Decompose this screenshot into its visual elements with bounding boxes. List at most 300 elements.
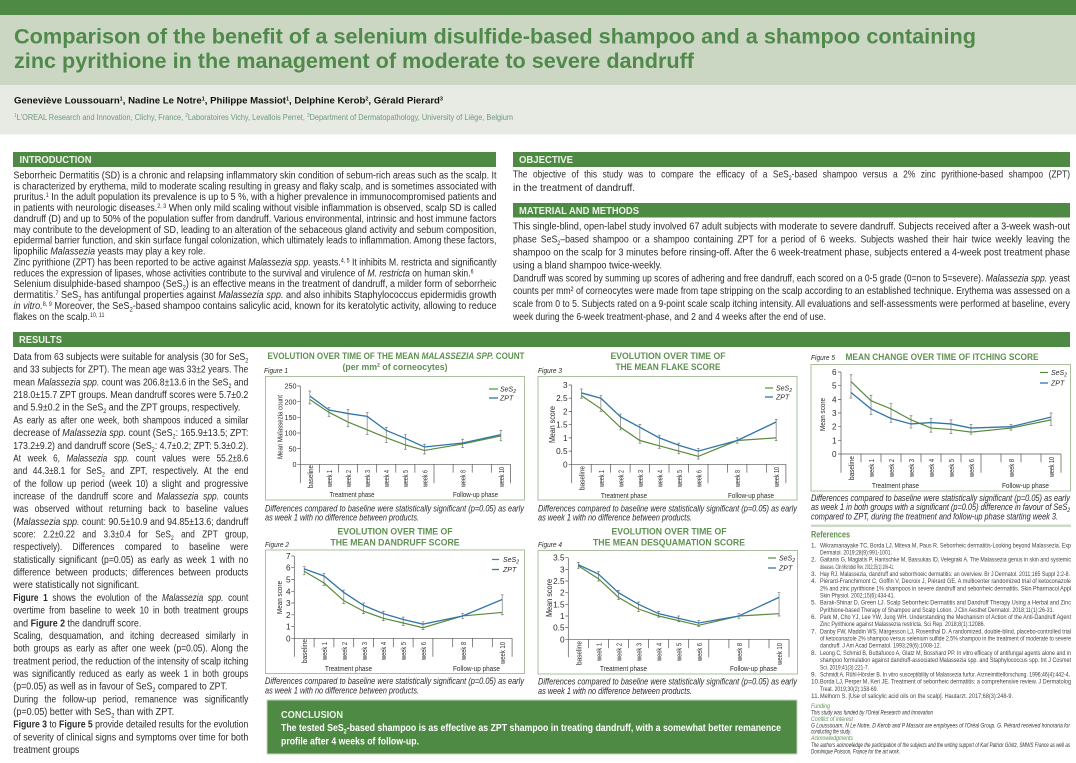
chart title: figure 1: EVOLUTION OVER TIME OF THE MEAN MALASSEZIA SPP. COUNT: [268, 351, 525, 362]
line chart: figure 1: 250: [284, 382, 296, 391]
line chart: figure 5: Follow-up phase: [1002, 481, 1049, 490]
caption: figure 4: as week 1 with no difference between products.: [538, 686, 692, 696]
text block: results: 2: [173, 434, 176, 441]
text block: results: [12, 352, 249, 756]
chart title: figure 5: MEAN CHANGE OVER TIME OF ITCHING SCORE: [846, 352, 1039, 363]
text block: results: was significantly reduced as early as week 1 in both groups: [12, 669, 248, 680]
conclusion box: [267, 700, 797, 754]
line chart: figure 3: 3: [563, 381, 568, 390]
text block: results: (p=0.05) as well as in favour of SeS: [13, 682, 178, 693]
line chart: figure 1: 2: [512, 389, 516, 395]
line chart: figure 1: Follow-up phase: [453, 490, 498, 499]
line chart: figure 5: SeS: [1051, 370, 1064, 377]
funding and acknowledgments: Funding: [811, 703, 830, 710]
caption: figure 2: Differences compared to baseline were statistically significant (p=0.05) as early: [265, 676, 525, 686]
text block: results: and 44.3±8.1 for SeS: [13, 466, 123, 477]
line chart: figure 1: week 8: [459, 470, 468, 488]
line chart: figure 3: Treatment phase: [601, 491, 647, 500]
line chart: figure 5: week 8: [1007, 459, 1016, 478]
line chart: figure 4: 2.5: [553, 577, 565, 586]
text block: introduction: has antifungal properties against: [82, 290, 218, 301]
line chart: figure 5: week 10: [1047, 457, 1056, 478]
text block: results: During the follow-up period, remanence was significantly: [13, 694, 249, 705]
references list: diseases. Clin Microbiol Rev. 2012;25(1):106-41.: [820, 564, 894, 571]
references list: 7.: [811, 628, 817, 635]
caption: figure 1: Differences compared to baseline were statistically significant (p=0.05) as early: [265, 504, 525, 514]
text block: results: and 5.9±0.2 in the SeS: [13, 403, 119, 414]
caption: figure 1: as week 1 with no difference between products.: [265, 512, 419, 522]
line chart: figure 1: Mean Malassezia count: [276, 394, 284, 459]
affiliations: Department of Dermatopathology, University of Liège, Belgium: [310, 112, 513, 122]
line chart: figure 5: 0: [832, 450, 837, 459]
text block: results: decrease of Malassezia spp. count (SeS: [13, 428, 180, 439]
chart title: figure 1: (per mm² of corneocytes): [342, 362, 448, 373]
line chart: figure 5: 2: [832, 423, 837, 432]
line chart: figure 2: week 8: [459, 642, 468, 661]
chart title: figure 1: [268, 351, 525, 373]
line chart: figure 1: week 3: [363, 470, 372, 488]
text block: results: : 4.7±0.2; ZPT: 5.3±0.2).: [155, 441, 248, 452]
caption: figure 3: as week 1 with no difference between products.: [538, 512, 692, 522]
line chart: figure 1: 100: [284, 429, 296, 438]
text block: results: 2: [245, 358, 249, 364]
line chart: figure 5: week 1: [867, 459, 876, 478]
panel: figure 5 itching score: [811, 352, 1071, 522]
line chart: figure 2: 3: [286, 599, 291, 608]
text block: methods: week during the 6-week treatment-phase, and 2 and 4 weeks after the end of use.: [512, 312, 826, 323]
text block: results: of the follow up period (week 10) a slight and progressive: [13, 479, 248, 490]
text block: introduction: 2: [129, 306, 133, 313]
line chart: figure 4: week 1: [594, 643, 603, 662]
text block: results: (p=0.05) better with SeS: [13, 707, 126, 718]
line chart: figure 3: SeS: [776, 386, 789, 392]
line chart: figure 5: week 3: [907, 459, 916, 478]
affiliations: 2: [185, 113, 188, 119]
text block: results: 218.0±15.7 ZPT groups. Mean dandruff scores were 5.7±0.2: [13, 390, 248, 401]
text block: results: treatment period, the reduction of the intensity of scalp itching: [13, 656, 248, 667]
line chart: figure 5: 4: [832, 395, 837, 404]
funding and acknowledgments: Acknowledgments: [810, 735, 854, 742]
conclusion text: [281, 723, 781, 748]
heading: material and methods: MATERIAL AND METHODS: [519, 205, 639, 217]
line chart: figure 4: Follow-up phase: [730, 664, 777, 673]
line chart: figure 3: ZPT: [775, 394, 790, 402]
line chart: figure 3: week 3: [636, 470, 645, 488]
line chart: figure 4: baseline: [574, 641, 583, 665]
line chart: figure 5: 2: [1063, 372, 1067, 378]
references heading: References: [811, 530, 850, 540]
text block: introduction: 7: [55, 291, 59, 297]
conclusion text: The tested SeS: [281, 723, 354, 734]
text block: results: was observed without returning back to baseline values: [12, 504, 248, 515]
chart title: figure 2: THE MEAN DANDRUFF SCORE: [330, 538, 460, 548]
text block: results: 2: [111, 712, 115, 720]
text block: introduction: 2, 3: [157, 204, 167, 210]
text block: introduction: Selenium disulphide-based shampoo (SeS: [14, 279, 203, 290]
authors: 1: [120, 96, 123, 102]
line chart: figure 3: 2: [788, 388, 792, 394]
references list: 9.: [811, 671, 817, 678]
text block: objective: The objective of this study was to compare the efficacy of a SeS: [513, 170, 855, 180]
line chart: figure 1: [266, 376, 524, 500]
text block: introduction: in patients with neurologic diseases.: [14, 203, 174, 214]
line chart: figure 2: 2: [286, 611, 291, 620]
line chart: figure 5: Mean score: [818, 398, 827, 431]
text block: results: 2: [171, 535, 174, 542]
references list: Dermatol. 2019;28(9):991-1001.: [820, 550, 892, 556]
line chart: figure 1: baseline: [306, 465, 315, 488]
line chart: figure 1: week 5: [401, 470, 410, 488]
line chart: figure 5: Treatment phase: [872, 481, 919, 490]
text block: results: overtime from baseline to week 10 in both treatment groups: [13, 606, 248, 617]
title: [14, 24, 976, 73]
text block: introduction: [14, 170, 497, 323]
text block: methods: using a bland shampoo twice-weekly.: [513, 260, 662, 271]
text block: results: of severity of clinical signs and symptoms over time for both: [13, 732, 248, 743]
text block: objective: in the treatment of dandruff.: [513, 183, 635, 194]
text block: results: statistically significant (p=0.05) as early as week 1 with no: [13, 555, 248, 566]
heading: objective: [513, 152, 1070, 167]
line chart: figure 3: 1.5: [556, 421, 568, 430]
text block: results: respectively). Differences compared to baseline were: [13, 542, 248, 553]
funding and acknowledgments: Conflict of interest: [811, 716, 853, 723]
funding and acknowledgments: [810, 703, 1071, 756]
line chart: figure 4: 3: [560, 565, 565, 574]
panel: figure 4 desquamation score: [538, 526, 798, 696]
heading: introduction: INTRODUCTION: [20, 154, 92, 166]
text block: introduction: 1: [46, 193, 49, 199]
line chart: figure 5: week 2: [887, 459, 896, 478]
line chart: figure 2: 6: [286, 564, 291, 573]
line chart: figure 1: 150: [284, 413, 296, 422]
line chart: figure 4: 2: [791, 558, 795, 564]
text block: introduction: -based shampoo contains salicylic acid, known for its keratolytic activity, allowing to reduce: [133, 301, 497, 312]
text block: introduction: 2: [183, 285, 186, 292]
line chart: figure 1: week 2: [344, 470, 353, 488]
text block: results: 2: [152, 446, 155, 453]
chart title: figure 4: THE MEAN DESQUAMATION SCORE: [593, 538, 746, 548]
text block: methods: phase SeS: [513, 234, 566, 245]
authors: , Philippe Massiot: [205, 96, 287, 106]
figure 1 label: Figure 1: [264, 366, 288, 375]
text block: results: Figure 3 to Figure 5 provide detailed results for the evolution: [13, 720, 248, 731]
text block: introduction: Seborrheic Dermatitis (SD) is a chronic and relapsing inflammatory skin condition of sebum-rich areas such as the scalp. It: [14, 170, 497, 182]
panel: introduction: [13, 152, 497, 323]
text block: introduction: epidermal barrier function, and skin surface fungal colonization, which ultimately leads to inflammation. Among these factors,: [14, 236, 496, 247]
line chart: figure 2: baseline: [300, 639, 309, 663]
conclusion text: -based shampoo is as effective as ZPT shampoo in treating dandruff, with a somewhat better remanence: [347, 723, 781, 734]
references list: 2.: [811, 557, 817, 564]
text block: results: treatment groups: [13, 745, 79, 756]
line chart: figure 1: 200: [284, 397, 296, 406]
panel: figure 2 dandruff score: [265, 526, 525, 696]
line chart: figure 3: week 2: [616, 470, 625, 488]
caption: figure 1: [265, 504, 525, 522]
caption: figure 4: [538, 676, 798, 696]
affiliations: 3: [307, 113, 310, 119]
line chart: figure 5: 1: [832, 436, 837, 445]
panel: figure 1 malassezia count: [264, 351, 525, 522]
text block: results: and Figure 2 the dandruff score.: [13, 618, 141, 629]
panel: figure 3 flake score: [538, 351, 798, 522]
figure 5 label: Figure 5: [811, 353, 836, 362]
text block: results: : 165.9±13.5; ZPT:: [176, 428, 248, 439]
line chart: figure 2: Follow-up phase: [453, 664, 500, 673]
references list: 8.: [811, 650, 817, 657]
line chart: figure 2: week 2: [340, 642, 349, 661]
text block: introduction: 6: [471, 269, 474, 275]
line chart: figure 2: week 4: [379, 642, 388, 661]
heading: results: [13, 332, 1070, 347]
text block: introduction: flakes on the scalp.: [14, 312, 99, 323]
text block: results: and ZPT group,: [174, 530, 248, 540]
line chart: figure 3: week 8: [733, 470, 742, 488]
funding and acknowledgments: conducting the study.: [811, 730, 851, 736]
line chart: figure 3: Mean score: [547, 406, 557, 443]
line chart: figure 4: SeS: [779, 556, 792, 562]
text block: introduction: is characterized by erythema, mild to moderate scaling resulting in greasy and flaky scalp, and is sometimes associated with: [14, 181, 496, 192]
references list: 1.: [811, 542, 817, 549]
caption: figure 5: [811, 493, 1071, 522]
line chart: figure 2: 4: [286, 587, 291, 596]
line chart: figure 4: 0: [560, 635, 565, 644]
text block: methods: 2: [557, 240, 561, 247]
line chart: figure 3: week 1: [597, 470, 606, 488]
caption: figure 5: 2: [1067, 508, 1071, 514]
text block: introduction: reduces the expression of lipases, whose activities contribute to the survival and virulence of M. restricta on human skin.: [14, 268, 480, 279]
caption: figure 2: as week 1 with no difference between products.: [265, 686, 419, 696]
text block: introduction: In the adult population its prevalence is up to 5 %, with a higher prevalence in immunocompromised patients and: [49, 192, 497, 203]
chart title: figure 3: [610, 351, 726, 373]
chart title: figure 2: EVOLUTION OVER TIME OF: [338, 526, 453, 538]
line chart: figure 4: ZPT: [778, 566, 793, 572]
line chart: figure 5: week 5: [947, 459, 956, 478]
line chart: figure 4: 1: [560, 612, 565, 621]
line chart: figure 3: Follow-up phase: [728, 491, 774, 500]
chart title: figure 3: THE MEAN FLAKE SCORE: [616, 362, 721, 373]
text block: results: mean Malassezia spp. count was 206.8±13.6 in the SeS: [13, 377, 255, 388]
text block: introduction: Malassezia spp. and also inhibits Staphylococcus epidermidis growth: [218, 290, 517, 301]
line chart: figure 4: week 4: [655, 643, 664, 662]
conclusion text: profile after 4 weeks of follow-up.: [281, 736, 419, 748]
text block: introduction: 2: [78, 296, 82, 302]
figure 4 label: Figure 4: [538, 540, 562, 549]
line chart: figure 4: 2: [560, 589, 565, 598]
line chart: figure 4: Treatment phase: [600, 664, 647, 673]
line chart: figure 3: [538, 376, 797, 500]
line chart: figure 2: week 10: [498, 642, 507, 665]
text block: introduction: Zinc pyrithione (ZPT) has been reported to be active against Malassezia spp. yeasts.: [14, 257, 345, 268]
title: zinc pyrithione in the management of moderate to severe dandruff: [14, 48, 695, 73]
text block: results: 173.2±9.2) and dandruff score (SeS: [13, 441, 178, 452]
line chart: figure 2: 2: [515, 560, 519, 566]
conclusion text: 2: [344, 728, 347, 736]
chart title: figure 2: [330, 526, 460, 548]
line chart: figure 4: week 3: [634, 643, 644, 662]
authors: Geneviève Loussouarn: [14, 96, 120, 106]
line chart: figure 5: week 6: [967, 459, 976, 478]
line chart: figure 4: 1.5: [553, 600, 565, 609]
line chart: figure 5: 3: [832, 409, 837, 418]
authors: , Delphine Kerob: [289, 96, 365, 106]
line chart: figure 4: week 5: [675, 643, 684, 662]
text block: results: Scaling, desquamation, and itching decreased similarly in: [13, 631, 248, 642]
text block: results: Data from 63 subjects were suitable for analysis (30 for SeS: [13, 352, 289, 363]
affiliations: 1: [14, 113, 17, 119]
text block: results: difference between products; differences between products: [13, 568, 248, 579]
line chart: figure 4: 3.5: [553, 554, 565, 563]
line chart: figure 3: 0: [563, 460, 568, 469]
heading: objective: OBJECTIVE: [519, 154, 573, 166]
text block: introduction: 8, 9: [43, 302, 52, 308]
line chart: figure 2: Treatment phase: [325, 664, 372, 673]
text block: methods: [512, 222, 1071, 323]
line chart: figure 3: 2: [563, 407, 568, 416]
text block: objective: 2: [789, 175, 792, 182]
line chart: figure 5: 5: [832, 382, 837, 391]
line chart: figure 3: week 10: [772, 467, 781, 488]
text block: results: and ZPT, respectively. At the end: [105, 466, 248, 477]
line chart: figure 5: ZPT: [1050, 380, 1065, 388]
line chart: figure 2: [266, 550, 524, 674]
references list: Treat. 2019;30(2):158-69.: [820, 686, 878, 693]
text block: introduction: SeS: [59, 290, 79, 301]
authors: , Gérald Pierard: [368, 96, 440, 106]
funding and acknowledgments: Dominique Poisson, France for the art work.: [811, 750, 900, 756]
line chart: figure 2: week 5: [399, 642, 408, 661]
text block: introduction: pruritus.: [14, 192, 50, 203]
references list: 3.: [811, 571, 817, 578]
references panel: [810, 524, 1072, 756]
references list: 6.: [811, 614, 817, 621]
line chart: figure 5: week 4: [927, 459, 936, 478]
caption: figure 3: Differences compared to baseline were statistically significant (p=0.05) as early: [538, 504, 798, 514]
line chart: figure 2: SeS: [503, 557, 516, 564]
references list: [811, 542, 1072, 700]
line chart: figure 1: ZPT: [499, 396, 514, 402]
line chart: figure 3: week 5: [675, 470, 684, 488]
affiliations: Laboratoires Vichy, Levallois Perret,: [188, 112, 307, 122]
heading: material and methods: [513, 203, 1070, 218]
authors: 1: [202, 96, 205, 102]
line chart: figure 4: week 8: [735, 643, 744, 662]
line chart: figure 2: ZPT: [502, 567, 517, 574]
references list: Sci. 2019;41(3):221-7.: [820, 664, 869, 671]
authors: 2: [365, 96, 368, 102]
text block: results: and: [231, 377, 248, 388]
line chart: figure 1: week 4: [382, 470, 391, 488]
text block: introduction: It inhibits M. restricta and significantly: [350, 257, 496, 268]
caption: figure 2: [265, 676, 525, 696]
references list: 11.: [811, 693, 820, 700]
text block: results: (Malassezia spp. count: 90.5±10.9 and 94.85±13.6; dandruff: [13, 517, 248, 528]
line chart: figure 1: 0: [292, 460, 296, 469]
line chart: figure 2: 7: [286, 552, 291, 561]
line chart: figure 1: week 6: [420, 470, 430, 488]
line chart: figure 4: week 6: [695, 643, 704, 662]
line chart: figure 3: 0.5: [556, 447, 568, 456]
line chart: figure 5: baseline: [847, 456, 856, 480]
text block: introduction: may contribute to the development of SD, leading to an alteration of the sebaceous gland activity and sebum composition,: [14, 225, 496, 236]
references list: 5.: [811, 600, 817, 607]
text block: results: and 33 subjects for ZPT). The mean age was 33±2 years. The: [13, 365, 248, 376]
panel: material and methods: [512, 203, 1071, 323]
references list: 4.: [811, 578, 817, 585]
line chart: figure 2: week 6: [419, 642, 428, 661]
figure 3 label: Figure 3: [538, 366, 563, 375]
heading: results: RESULTS: [19, 334, 62, 346]
references list: Skin Physiol. 2002;15(6):434-41.: [820, 592, 895, 600]
line chart: figure 1: week 1: [325, 470, 334, 488]
text block: results: 2: [228, 383, 232, 390]
text block: introduction: lipophilic Malassezia yeasts may play a key role.: [14, 247, 206, 258]
chart title: figure 4: EVOLUTION OVER TIME OF: [612, 526, 727, 538]
text block: results: increase of the dandruff score and Malassezia spp. counts: [13, 492, 248, 502]
line chart: figure 1: Treatment phase: [330, 490, 374, 499]
line chart: figure 4: 0.5: [553, 624, 565, 633]
text block: introduction: ) is an effective means in the treatment of dandruff, a milder form of seborrheic: [186, 279, 496, 290]
text block: results: At week 6, Malassezia spp. count values were 55.2±8.6: [13, 453, 248, 464]
line chart: figure 3: week 6: [694, 470, 703, 488]
text block: methods: Dandruff was scored by summing up scores of adhering and free dandruff, each scored on a 0-5 grade (0=non to 5=severe). Malassezia spp. yeast: [513, 273, 1070, 284]
line chart: figure 5: [811, 364, 1070, 491]
text block: introduction: 10, 11: [90, 313, 105, 319]
line chart: figure 4: week 10: [775, 643, 784, 666]
text block: results: 2: [152, 687, 156, 694]
references list: 10.: [811, 679, 820, 686]
chart title: figure 4: [593, 526, 746, 548]
text block: introduction: in vitro.: [14, 301, 43, 312]
text block: objective: [513, 170, 1070, 194]
references list: dandruff. J Am Acad Dermatol. 1993;29(6):1008-12.: [820, 643, 941, 650]
text block: introduction: 4, 5: [341, 258, 350, 264]
line chart: figure 3: 1: [563, 434, 568, 443]
title: Comparison of the benefit of a selenium disulfide-based shampoo and a shampoo containing: [14, 24, 976, 48]
line chart: figure 1: week 10: [497, 467, 506, 488]
text block: introduction: When only mild scaling without visible inflammation is observed, scalp SD is called: [166, 203, 497, 214]
line chart: figure 3: baseline: [577, 466, 586, 490]
line chart: figure 2: 5: [286, 576, 291, 584]
text block: results: 2: [102, 472, 105, 479]
line chart: figure 2: Mean score: [275, 581, 284, 614]
text block: results: and the ZPT groups, respectively.: [106, 403, 240, 414]
caption: figure 4: Differences compared to baseline were statistically significant (p=0.05) as early: [538, 676, 798, 686]
text block: introduction: dermatitis.: [14, 290, 60, 301]
line chart: figure 3: week 4: [655, 470, 664, 488]
text block: results: 2: [103, 408, 107, 415]
text block: results: both groups as early as after one week (p=0.05). Along the: [13, 644, 248, 655]
text block: results: Figure 1 shows the evolution of the Malassezia spp. count: [13, 593, 248, 604]
chart title: figure 3: EVOLUTION OVER TIME OF: [610, 351, 726, 362]
conclusion heading: CONCLUSION: [281, 709, 343, 721]
references list: Zinc Pyrithione against Malassezia restricta. Sci Rep. 2018;8(1):12086.: [820, 621, 985, 628]
line chart: figure 4: Mean score: [544, 579, 554, 617]
caption: figure 3: [538, 504, 798, 522]
line chart: figure 5: 6: [832, 368, 837, 377]
line chart: figure 3: 2.5: [556, 394, 568, 403]
text block: results: score: 2.2±0.22 and 3.3±0.4 for SeS: [13, 530, 213, 540]
line chart: figure 4: week 2: [614, 643, 624, 662]
line chart: figure 1: SeS: [500, 386, 513, 394]
line chart: figure 2: 0: [286, 634, 291, 643]
header banner: [0, 0, 1076, 134]
line chart: figure 2: week 3: [360, 642, 369, 661]
text block: results: than with ZPT.: [114, 707, 174, 718]
text block: results: were statistically not significant.: [12, 580, 139, 591]
panel: objective: [513, 152, 1070, 194]
figure 2 label: Figure 2: [265, 540, 290, 549]
line chart: figure 1: 50: [288, 444, 296, 453]
